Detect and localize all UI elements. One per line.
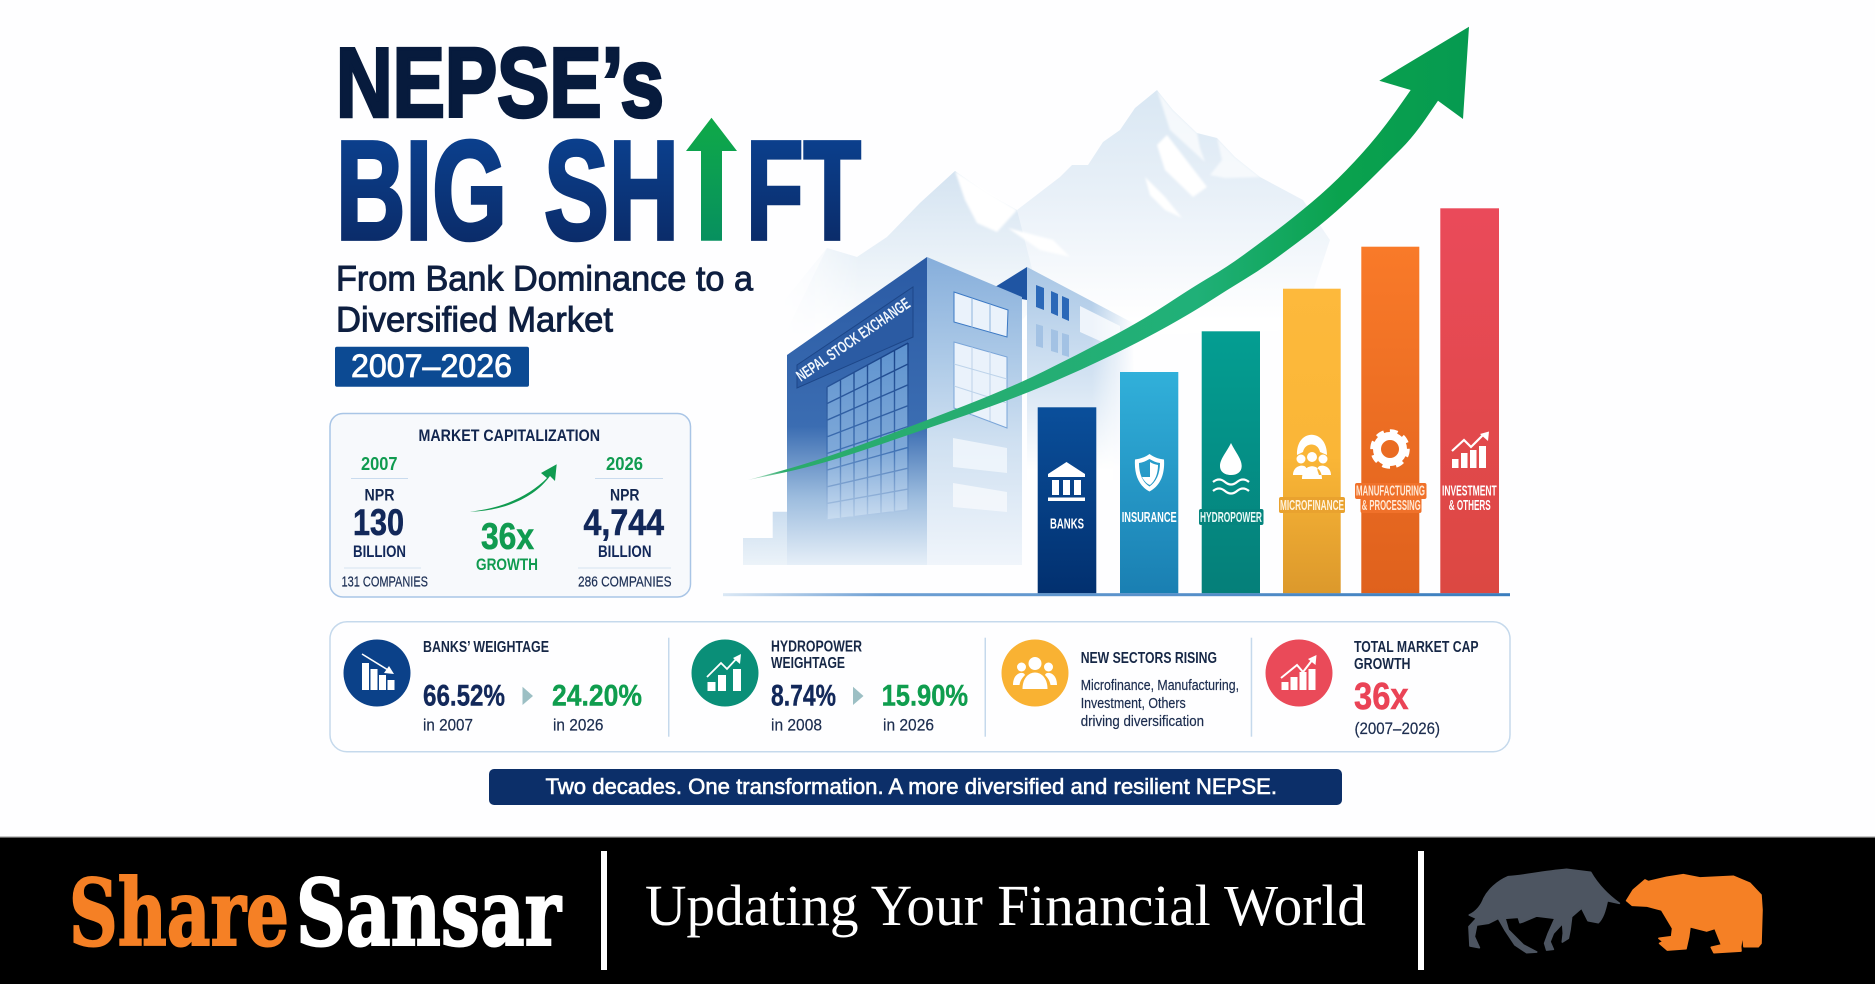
stat: hydropower weightage — [692, 639, 968, 735]
stat: total market cap growth: (2007–2026) — [1354, 720, 1440, 738]
icon: small growth arrow — [470, 464, 557, 512]
right facade windows — [953, 292, 1008, 512]
icon: water drop — [1220, 443, 1242, 475]
growth arrow — [748, 27, 1469, 480]
stat: banks' weightage: in 2007 — [423, 717, 473, 735]
stat: hydropower weightage: in 2008 — [771, 717, 822, 735]
bar: microfinance: MICROFINANCE — [1280, 498, 1344, 514]
closing banner: Two decades. One transformation. A more diversified and resilient NEPSE. — [546, 774, 1277, 799]
rear block corner — [995, 267, 1027, 300]
column: 2026: 286 COMPANIES — [578, 575, 672, 591]
bar: banks — [1038, 407, 1096, 593]
rear block — [1027, 267, 1130, 450]
stat: banks' weightage: in 2026 — [553, 717, 604, 735]
icon: rising chart — [1281, 655, 1316, 690]
bar: insurance: INSURANCE — [1122, 510, 1177, 526]
closing banner — [489, 769, 1342, 805]
subtitle: From Bank Dominance to a — [336, 260, 754, 299]
bar: investment: INVESTMENT — [1442, 484, 1497, 500]
panel heading: MARKET CAPITALIZATION — [418, 427, 600, 445]
icon: rising bars — [707, 654, 741, 691]
icon: green up arrow in title — [686, 118, 737, 241]
icon: shield — [1135, 454, 1164, 492]
stat: hydropower weightage: 8.74% — [771, 680, 836, 713]
title: BIG SHIFT — [336, 111, 861, 269]
icon: waves — [1213, 480, 1249, 494]
bar: investment: & OTHERS — [1449, 498, 1491, 514]
column: 2007: 2007 — [361, 454, 398, 474]
subtitle — [336, 260, 754, 340]
title: NEPSE's: NEPSE’s — [336, 28, 664, 138]
stat: new sectors rising: Investment, Others — [1081, 696, 1186, 712]
icon: people — [1013, 657, 1057, 689]
panel: key statistics — [330, 622, 1510, 752]
left facade window grid — [827, 343, 908, 520]
icon: triangle separator — [522, 687, 533, 705]
stat: hydropower weightage: WEIGHTAGE — [771, 655, 845, 672]
icon: bull — [1469, 869, 1619, 953]
stat: banks' weightage — [344, 639, 642, 735]
icon: people under dome — [1293, 435, 1331, 479]
chart baseline — [723, 593, 1510, 596]
growth callout: GROWTH — [476, 555, 538, 574]
mountain snow ridges — [955, 90, 1260, 257]
icon: triangle separator — [853, 687, 864, 705]
title: BIG SHIFT: FT — [746, 111, 861, 269]
base steps — [743, 512, 790, 565]
bar chart: sectors — [723, 208, 1510, 596]
left facade — [787, 257, 927, 565]
bar: manufacturing: & PROCESSING — [1362, 498, 1421, 514]
column: 2007: NPR — [364, 487, 395, 505]
growth callout — [470, 464, 557, 574]
bar: hydropower — [1199, 331, 1264, 593]
stat: total market cap growth: TOTAL MARKET CAP — [1354, 639, 1479, 656]
column: 2026: 4,744 — [584, 502, 664, 543]
column: 2007: 131 COMPANIES — [342, 575, 428, 591]
column: 2026: BILLION — [598, 542, 652, 561]
stat: banks' weightage: 24.20% — [552, 680, 642, 713]
column: 2026 — [578, 454, 672, 591]
icon: bear — [1627, 875, 1762, 953]
icon: bank — [1048, 462, 1085, 501]
column: 2026: NPR — [610, 487, 640, 505]
subtitle: Diversified Market — [336, 301, 613, 340]
bar: manufacturing: MANUFACTURING — [1356, 484, 1425, 500]
sign strip with text — [794, 287, 914, 388]
stat: new sectors rising: Microfinance, Manufacturing, — [1081, 678, 1239, 694]
title: BIG SHIFT: BIG — [336, 111, 507, 269]
bar: insurance — [1120, 372, 1178, 593]
stat: new sectors rising: NEW SECTORS RISING — [1081, 650, 1217, 667]
stat: new sectors rising — [1002, 640, 1239, 730]
stat: hydropower weightage: HYDROPOWER — [771, 639, 862, 656]
illustration: Nepal Stock Exchange building — [743, 257, 1135, 565]
logo: ShareSansar: Sansar — [296, 859, 562, 967]
stat: banks' weightage: BANKS’ WEIGHTAGE — [423, 639, 549, 656]
column: 2007: 130 — [353, 502, 404, 543]
right facade — [927, 257, 1022, 565]
stat: total market cap growth: 36x — [1354, 676, 1409, 718]
stat: total market cap growth — [1266, 639, 1479, 738]
stat: hydropower weightage: 15.90% — [882, 680, 968, 713]
logo: ShareSansar — [69, 859, 562, 967]
sign strip with text: NEPAL STOCK EXCHANGE — [794, 295, 914, 385]
bar: banks: BANKS — [1050, 516, 1084, 532]
footer band — [0, 836, 1875, 984]
bar: microfinance — [1279, 289, 1345, 593]
title: BIG SHIFT: SH — [544, 111, 679, 269]
column: 2007 — [342, 454, 428, 591]
icon: rising chart — [1452, 432, 1489, 468]
title: BIG SHIFT: I — [698, 111, 725, 269]
panel: market capitalization — [330, 414, 690, 597]
icon: falling bars — [362, 654, 394, 690]
stat: total market cap growth: GROWTH — [1354, 656, 1410, 673]
bar: investment — [1440, 208, 1499, 593]
column: 2026: 2026 — [606, 454, 643, 474]
stat: banks' weightage: 66.52% — [423, 680, 505, 713]
stat: hydropower weightage: in 2026 — [883, 717, 934, 735]
stat: new sectors rising: driving diversification — [1081, 714, 1204, 730]
column: 2007: BILLION — [353, 542, 406, 561]
illustration: mountains — [817, 90, 1330, 304]
logo: ShareSansar: Share — [69, 859, 289, 967]
bar: hydropower: HYDROPOWER — [1200, 510, 1262, 526]
tagline: Updating Your Financial World — [645, 873, 1366, 938]
date badge: 2007–2026 — [351, 348, 512, 384]
bar: manufacturing — [1355, 247, 1426, 593]
icon: gear — [1372, 432, 1408, 466]
growth callout: 36x — [481, 516, 534, 557]
